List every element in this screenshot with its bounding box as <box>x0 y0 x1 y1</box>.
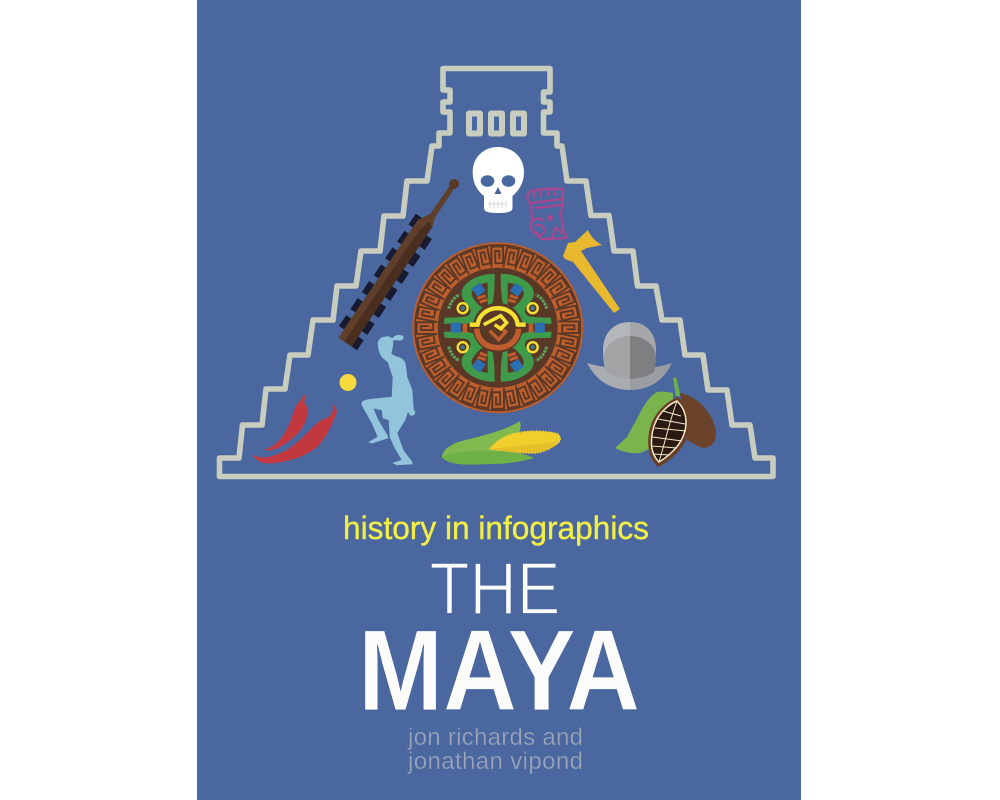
pyramid temple windows <box>469 114 524 134</box>
icon: corn cob <box>442 421 560 465</box>
icon: ball <box>340 374 356 391</box>
authors: jonathan vipond <box>407 748 583 775</box>
shield: aztec calendar disc <box>412 242 583 413</box>
shield: greek key ring <box>417 247 579 409</box>
icon: obsidian club <box>333 171 467 350</box>
icon: skull <box>473 147 524 213</box>
icon: gold axe <box>563 230 620 313</box>
shield: inner dark field <box>473 303 523 353</box>
authors <box>407 724 583 775</box>
shield: blue side squares <box>451 323 545 333</box>
cover background <box>197 0 801 800</box>
icon: conquistador helmet <box>587 322 672 390</box>
icon: chilli peppers <box>253 392 337 463</box>
authors: jon richards and <box>407 724 583 751</box>
icon: ball player <box>362 335 415 465</box>
shield: green quadrants <box>444 274 552 382</box>
shield: centre motif <box>463 308 533 348</box>
series title: history in infographics <box>343 510 649 546</box>
title: MAYA: MAYA <box>358 607 640 735</box>
pyramid outline <box>220 68 773 476</box>
icon: maya glyph <box>527 189 567 239</box>
title: THE: THE <box>430 547 560 630</box>
icon: cacao pods <box>615 377 716 467</box>
